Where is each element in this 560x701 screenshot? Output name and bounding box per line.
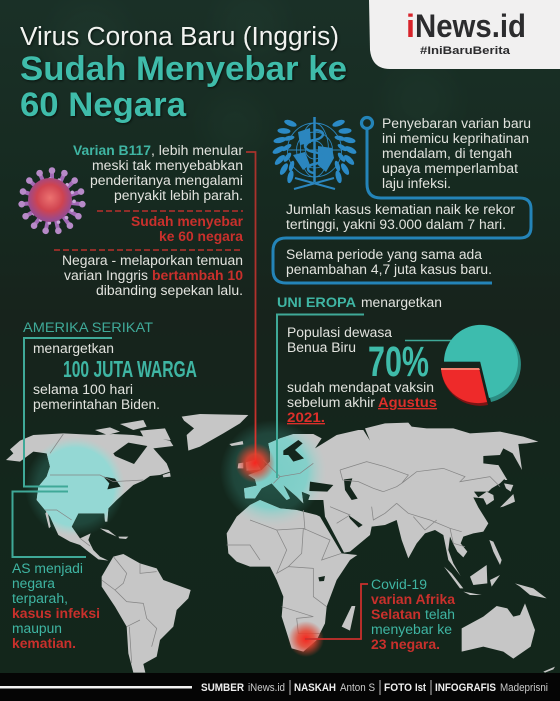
text block: AS terparah: AS menjadi: [12, 561, 83, 576]
text block: varian Afrika Selatan: varian Afrika: [371, 592, 456, 607]
credits: INFOGRAFIS: [435, 682, 496, 694]
text block: varian Afrika Selatan: Covid-19: [371, 577, 427, 592]
big number: 70%: [368, 338, 429, 386]
credits: iNews.id: [248, 682, 285, 694]
logo wordmark: News.id: [415, 8, 526, 44]
map: inland seas: [103, 477, 121, 489]
text block: varian Afrika Selatan: menyebar ke: [371, 622, 452, 637]
icon: coronavirus: [18, 167, 86, 235]
map: North America: [6, 420, 173, 561]
staff and serpent: [305, 117, 323, 182]
text block: deaths: Jumlah kasus kematian naik ke rekor: [286, 202, 516, 217]
connector: red line to South Africa: [288, 584, 368, 657]
text block: varian Afrika Selatan: [371, 577, 456, 652]
text block: EU target: Agustus: [378, 395, 437, 410]
connector: blue timeline: [273, 118, 531, 283]
halo: Europe: [242, 434, 322, 522]
text block: varian Afrika Selatan: telah: [425, 607, 455, 622]
text block: US target: 100 JUTA WARGA: [63, 356, 197, 382]
map: Eurasia, Africa, Australia: [227, 423, 555, 673]
text block: AS terparah: kasus infeksi: [12, 606, 100, 621]
logo hashtag: #IniBaruBerita: [420, 45, 511, 57]
text block: Varian B117: penyakit lebih parah.: [114, 188, 243, 203]
title: 60 Negara: [20, 86, 187, 124]
text block: US target: selama 100 hari: [33, 382, 133, 397]
credits: FOTO: [384, 682, 412, 694]
heading: Uni Eropa: [277, 295, 442, 310]
slice: vaccinated: [444, 325, 521, 402]
continents: [293, 128, 334, 172]
text block: deaths: tertinggi, yakni 93.000 dalam 7 hari.: [286, 217, 506, 232]
slice: remainder: [441, 368, 488, 406]
title: Virus Corona Baru (Inggris): [20, 23, 339, 51]
text block: EU target: Populasi dewasa: [287, 325, 392, 340]
map: South America: [102, 554, 191, 673]
logo panel: [369, 0, 560, 69]
text block: Varian B117: [73, 143, 244, 203]
footer bar: [0, 673, 560, 701]
text block: varian Afrika Selatan: 23 negara.: [371, 637, 440, 652]
connector: red line to Europe: [235, 152, 275, 483]
text block: deaths: [286, 202, 516, 232]
text block: Varian B117: meski tak menyebabkan: [92, 158, 243, 173]
text block: new cases: [286, 247, 492, 277]
text block: Sudah menyebar ke 60 negara: [54, 211, 244, 250]
text block: WHO concern: [382, 116, 531, 191]
text block: WHO concern: mendalam, di tengah: [382, 146, 512, 161]
text block: negara melaporkan: dibanding sepekan lalu.: [96, 283, 243, 298]
text block: US target: menargetkan: [33, 341, 114, 356]
halo: sea tint: [25, 420, 324, 537]
text block: US target: [33, 341, 197, 412]
heading: Amerika Serikat: AMERIKA SERIKAT: [23, 320, 153, 335]
credits: Anton S: [340, 682, 375, 694]
text block: EU target: Benua Biru: [287, 340, 356, 355]
icon: WHO emblem: [271, 117, 358, 189]
world map: [6, 414, 555, 673]
text block: WHO concern: upaya memperlambat: [382, 161, 518, 176]
text block: EU target: sudah mendapat vaksin: [287, 380, 434, 395]
credits: [201, 680, 548, 695]
text block: new cases: penambahan 4,7 juta kasus baru.: [286, 262, 492, 277]
text block: negara melaporkan: bertambah 10: [152, 268, 243, 283]
text block: EU target: 2021.: [287, 410, 325, 425]
halo: United States: [36, 440, 122, 534]
text block: Sudah menyebar ke 60 negara: ke 60 negara: [159, 229, 243, 244]
text block: WHO concern: ini memicu keprihatinan: [382, 131, 529, 146]
pie chart: 70 percent: [405, 325, 521, 406]
wreath: [271, 118, 358, 189]
credits: NASKAH: [294, 682, 336, 694]
credits: SUMBER: [201, 682, 244, 694]
heading: Uni Eropa: UNI EROPA: [277, 295, 356, 310]
map: country borders: [45, 434, 157, 663]
text block: varian Afrika Selatan: Selatan: [371, 607, 421, 622]
text block: AS terparah: kematian.: [12, 636, 76, 651]
text block: Varian B117: Varian B117: [73, 143, 151, 158]
text block: AS terparah: [12, 561, 100, 651]
title: Sudah Menyebar ke: [20, 50, 347, 88]
text block: negara melaporkan: Negara - melaporkan temuan: [62, 253, 243, 268]
credits: Ist: [415, 682, 426, 694]
globe: [287, 123, 342, 177]
text block: US target: pemerintahan Biden.: [33, 397, 160, 412]
bracket: AS menjadi: [12, 492, 86, 557]
text block: EU target: [287, 325, 437, 425]
text block: WHO concern: laju infeksi.: [382, 176, 451, 191]
text block: Sudah menyebar ke 60 negara: Sudah menyebar: [131, 214, 244, 229]
bracket: Uni Eropa: [277, 314, 364, 478]
text block: AS terparah: maupun: [12, 621, 62, 636]
text block: Varian B117: , lebih menular: [151, 143, 244, 158]
text block: WHO concern: Penyebaran varian baru: [382, 116, 531, 131]
bracket: Amerika Serikat: [24, 338, 112, 486]
title: [20, 23, 347, 124]
heading: Uni Eropa: menargetkan: [361, 295, 442, 310]
text block: AS terparah: terparah,: [12, 591, 68, 606]
text block: negara melaporkan: [62, 253, 243, 298]
credits: Madeprisni: [500, 682, 548, 694]
text block: new cases: Selama periode yang sama ada: [286, 247, 483, 262]
text block: EU target: sebelum akhir: [287, 395, 376, 410]
map: Greenland and Iceland: [182, 414, 248, 451]
text block: negara melaporkan: varian Inggris: [64, 268, 148, 283]
text block: AS terparah: negara: [12, 576, 55, 591]
text block: Varian B117: penderitanya mengalami: [90, 173, 243, 188]
logo wordmark: i: [406, 8, 415, 44]
